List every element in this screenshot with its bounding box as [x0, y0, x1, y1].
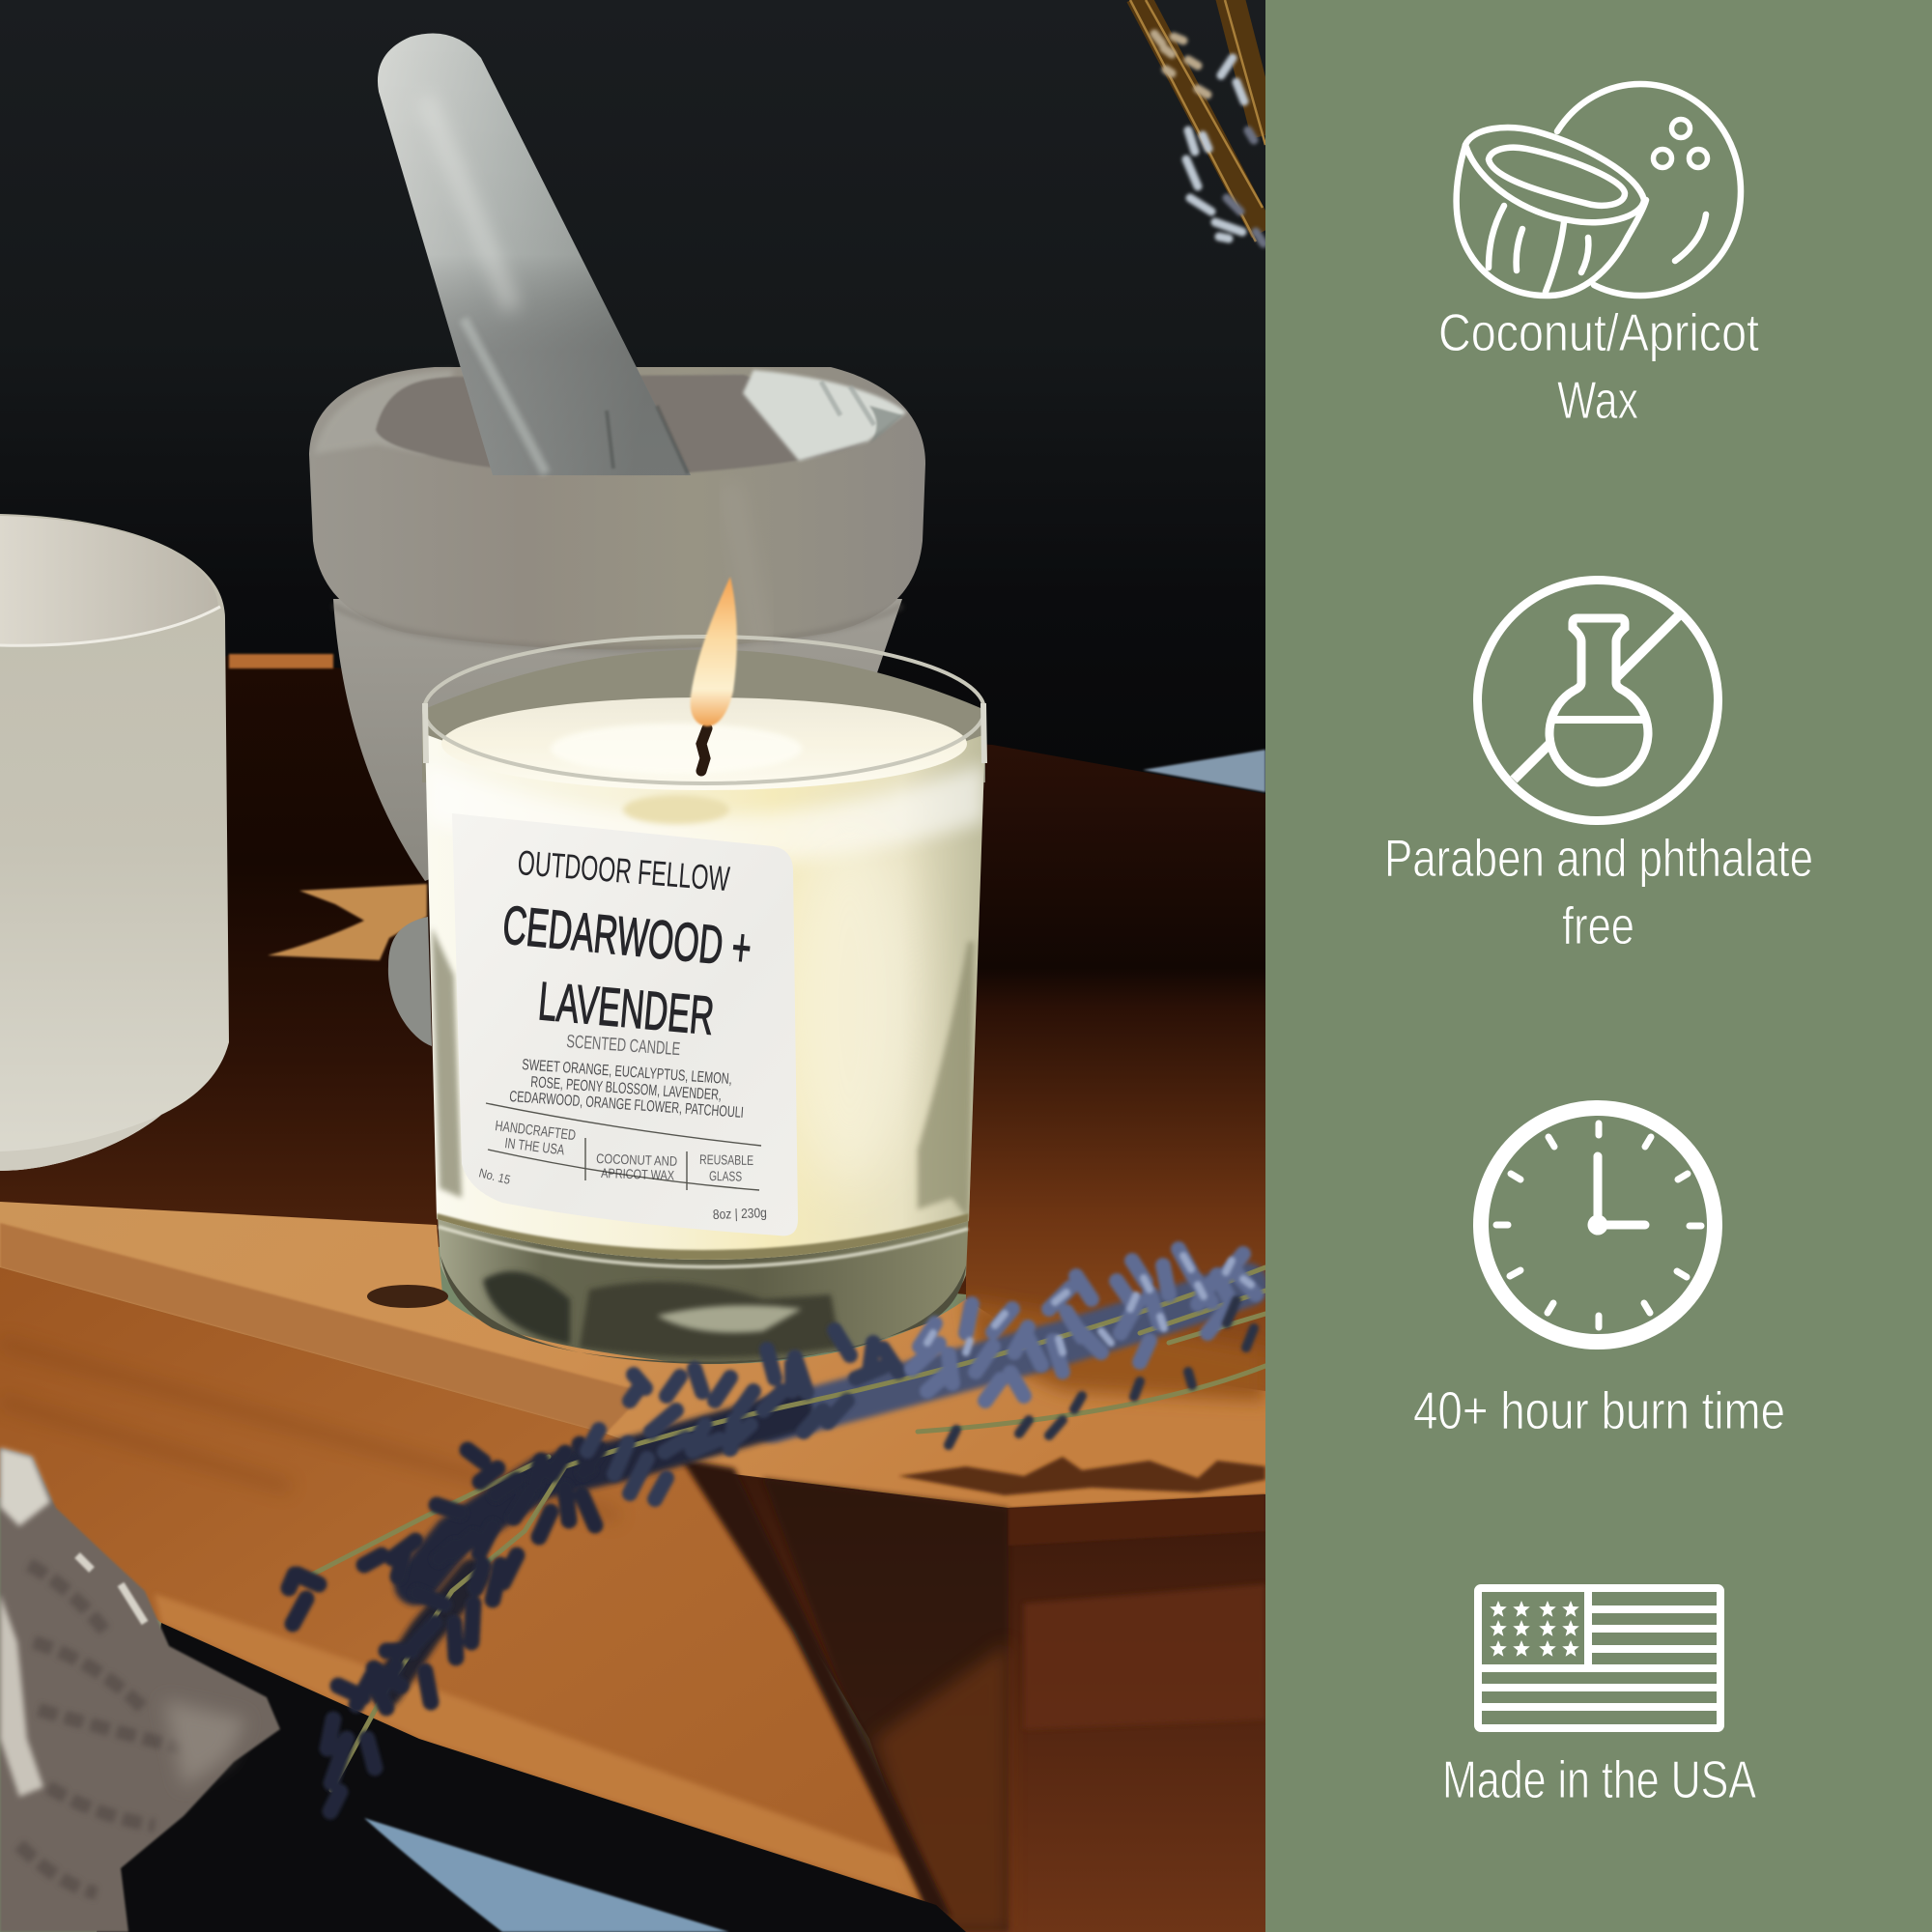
front face lit lower strip: [155, 1594, 936, 1905]
label text: [477, 842, 767, 1222]
shadow silhouettes of lavender on rim: [898, 1457, 1265, 1495]
tray dark surface: [0, 654, 1265, 1410]
label sticker: [452, 813, 798, 1236]
wax body: [425, 734, 985, 1260]
label text: APRICOT WAX: [601, 1165, 675, 1183]
label text: GLASS: [709, 1168, 742, 1184]
front face grain: [0, 1343, 618, 1517]
glass base: [438, 1219, 968, 1362]
lavender sprig on tray: [289, 1249, 1265, 1811]
mid blossoms: [587, 1330, 898, 1499]
label text: REUSABLE: [699, 1151, 753, 1168]
glass candle vessel: [422, 577, 985, 1362]
label text: IN THE USA: [504, 1135, 565, 1159]
label text: No. 15: [477, 1165, 512, 1187]
mortar lip: [309, 367, 925, 649]
white ceramic cup: [0, 514, 229, 1171]
panel background: [1265, 0, 1932, 1932]
dark floor: [97, 1623, 966, 1932]
sunlit patch on tray: [268, 884, 427, 960]
label text: SCENTED CANDLE: [566, 1032, 681, 1060]
tray front face: [0, 1267, 936, 1905]
blue blossoms, right end: [912, 1249, 1256, 1401]
marble pestle: [378, 33, 691, 475]
wax wash and shadows: [425, 763, 985, 1262]
glass interior back: [422, 649, 985, 782]
stems: [306, 1267, 1265, 1790]
flame: [691, 577, 737, 726]
feature: coconut wax: [1438, 84, 1759, 430]
glass base re-draw over rim: [440, 1256, 966, 1364]
wax top surface: [441, 697, 967, 790]
wick: [701, 728, 707, 771]
label text: ROSE, PEONY BLOSSOM, LAVENDER,: [530, 1074, 722, 1104]
dark blossoms, lower end: [289, 1444, 599, 1811]
feature: paraben free: [1384, 580, 1813, 955]
glass rim: [424, 637, 984, 783]
dried lavender upper right: [1130, 0, 1265, 243]
mortar lower body: [333, 599, 902, 881]
label: paraben and phthalate free: [1384, 828, 1813, 955]
label: made in the USA: Made in the USA: [1442, 1749, 1756, 1809]
icon: american flag: [1478, 1588, 1720, 1728]
panel: photo of lit candle: [0, 0, 1265, 1932]
feature: made in the USA: [1442, 1588, 1756, 1809]
label: coconut apricot wax: [1438, 302, 1759, 430]
label text: COCONUT AND: [596, 1151, 677, 1169]
label text: OUTDOOR FELLOW: [516, 842, 731, 898]
grey knitted towel: [0, 1448, 280, 1932]
label: coconut apricot wax: Coconut/Apricot: [1438, 302, 1759, 362]
panel: product features: [1265, 0, 1932, 1932]
dark fabric backdrop: [0, 0, 1265, 794]
tray dark corner face: [710, 1471, 1265, 1932]
lit rim brown reflection beside base: [966, 1299, 1265, 1401]
label: coconut apricot wax: Wax: [1557, 370, 1638, 430]
icon: crossed-out flask: [1478, 580, 1718, 821]
label text: HANDCRAFTED: [495, 1118, 577, 1144]
base top highlight: [439, 1227, 968, 1267]
diagonal shadow across front: [681, 1459, 952, 1918]
icon: coconuts: [1457, 84, 1741, 296]
blue cloth glimpse upper right: [1143, 750, 1265, 792]
label: paraben and phthalate free: Paraben and phthalate: [1384, 828, 1813, 888]
marble rim highlight: [743, 370, 906, 461]
label: 40+ hour burn time: 40+ hour burn time: [1413, 1380, 1785, 1440]
label text: LAVENDER: [536, 970, 717, 1046]
blue cloth patch: [364, 1818, 729, 1932]
tray lit rim top: [0, 1202, 1265, 1508]
label text: CEDARWOOD, ORANGE FLOWER, PATCHOULI: [509, 1089, 744, 1122]
label text: 8oz | 230g: [713, 1205, 767, 1222]
mortar opening: [376, 375, 867, 474]
mortar foot: [388, 917, 432, 1046]
feature: burn time: [1413, 1108, 1785, 1440]
wood knot: [367, 1285, 448, 1308]
marble mortar: [309, 367, 925, 1046]
label text: CEDARWOOD +: [500, 894, 754, 979]
rim inner band: [0, 1223, 645, 1434]
icon: clock: [1481, 1108, 1715, 1342]
blossom mass: [773, 1285, 1246, 1420]
label text: SWEET ORANGE, EUCALYPTUS, LEMON,: [522, 1057, 732, 1088]
label: paraben and phthalate free: free: [1562, 895, 1634, 955]
